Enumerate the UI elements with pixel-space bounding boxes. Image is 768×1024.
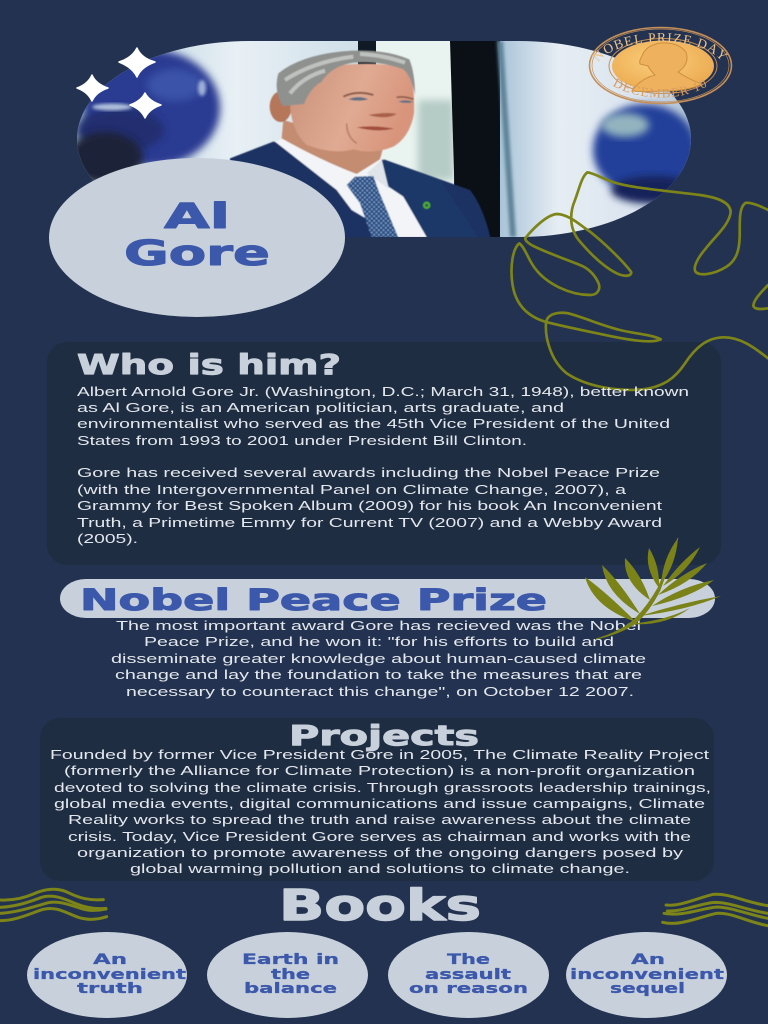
text block: nobel prize [111,618,646,699]
text block: biography: Grammy for Best Spoken Album (2009) for his book An Inconvenient [77,498,663,513]
text block: projects: crisis. Today, Vice President Gore serves as chairman and works with the [68,829,691,844]
text block: projects: devoted to solving the climate crisis. Through grassroots leadership trainings, [54,780,711,795]
book: the assault on reason [388,932,549,1018]
heading: nobel peace prize: Nobel Peace Prize [80,583,547,617]
book: an inconvenient truth: truth [77,981,143,997]
text block: biography [77,384,689,546]
text block: nobel prize: disseminate greater knowledge about human-caused climate [111,651,646,666]
text block: nobel prize: Peace Prize, and he won it: "for his efforts to build and [144,634,614,649]
heading: who is him: Who is him? [77,348,341,381]
text block: biography: Albert Arnold Gore Jr. (Washington, D.C.; March 31, 1948), better known [77,384,689,399]
icon: waves right [663,894,768,926]
name badge: Gore [124,234,270,274]
book: earth in the balance: Earth in [242,952,339,968]
text block: nobel prize: The most important award Gore has recieved was the Nobel [116,618,641,633]
text block: biography: Truth, a Primetime Emmy for Current TV (2007) and a Webby Award [77,515,662,530]
book: an inconvenient truth: An [93,952,127,968]
text block: biography: (2005). [77,531,138,546]
icon: Nobel Prize Day medal: DECEMBER 10 [612,78,706,98]
book: earth in the balance: balance [244,981,337,997]
book: the assault on reason: The [447,952,490,968]
book: an inconvenient sequel: inconvenient [570,967,724,983]
book: the assault on reason: on reason [409,981,528,997]
icon: monstera leaf outline [512,172,768,390]
panel: who is him [47,342,721,565]
text block: biography: (with the Intergovernmental Panel on Climate Change, 2007), a [77,482,627,497]
text block: projects: Reality works to spread the truth and raise awareness about the climate [68,812,691,827]
icon: waves left [0,889,107,921]
name badge [49,158,345,317]
text block: nobel prize: change and lay the foundation to take the measures that are [115,667,642,682]
icon: sparkles [77,48,161,118]
book: earth in the balance [207,932,368,1018]
heading: books: Books [279,881,481,931]
text block: biography: States from 1993 to 2001 under President Bill Clinton. [77,433,527,448]
banner: nobel peace prize [60,579,715,618]
icon: palm leaf [585,538,721,639]
book: an inconvenient sequel: sequel [610,981,685,997]
text block: projects [50,747,711,876]
text block: projects: global warming pollution and solutions to climate change. [130,861,630,876]
book: earth in the balance: the [271,967,310,983]
book: an inconvenient sequel [566,932,727,1018]
text block: biography: environmentalist who served as the 45th Vice President of the United [77,416,670,431]
text block: nobel prize: necessary to counteract this change", on October 12 2007. [126,684,634,699]
text block: biography: Gore has received several awards including the Nobel Peace Prize [77,465,660,480]
name text: Al [164,197,230,237]
icon: Nobel Prize Day medal [588,26,732,104]
book: the assault on reason: assault [425,967,511,983]
photo: Al Gore in front of globes [67,41,699,240]
heading: projects: Projects [289,719,479,752]
text block: projects: global media events, digital communications and issue campaigns, Climate [54,796,705,811]
book: an inconvenient truth [27,932,187,1018]
text block: biography: as Al Gore, is an American politician, arts graduate, and [77,400,564,415]
text block: projects: Founded by former Vice President Gore in 2005, The Climate Reality Project [50,747,710,762]
panel: projects [40,718,714,881]
book: an inconvenient sequel: An [631,952,665,968]
text block: projects: (formerly the Alliance for Climate Protection) is a non-profit organization [64,763,695,778]
icon: Nobel Prize Day medal: NOBEL PRIZE DAY [592,33,728,62]
text block: projects: organization to promote awareness of the ongoing dangers posed by [77,845,684,860]
book: an inconvenient truth: inconvenient [33,967,186,983]
